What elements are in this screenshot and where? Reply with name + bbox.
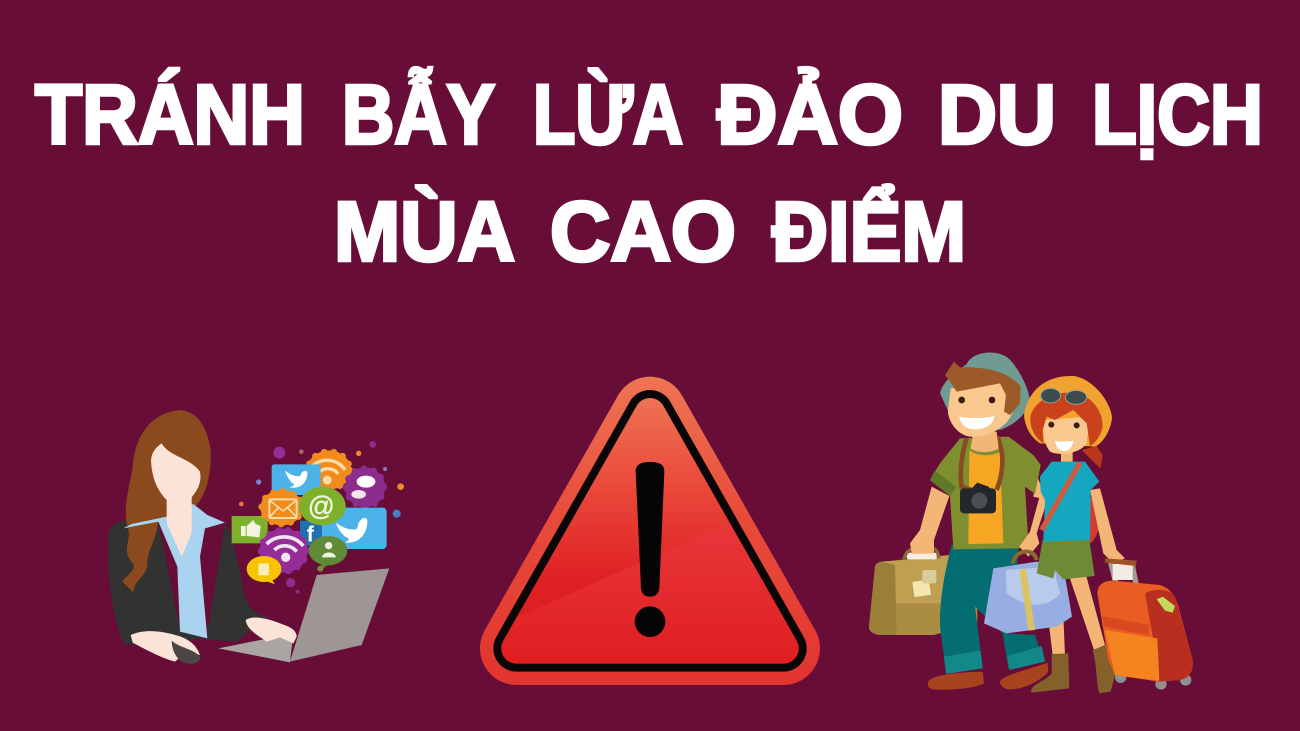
man hair (945, 362, 1021, 415)
hand on mouse (131, 631, 200, 662)
illustration: woman at laptop with social media icons (108, 410, 404, 664)
man eyes (958, 397, 995, 403)
title: DU (938, 67, 1056, 161)
woman legs (1043, 573, 1105, 655)
woman ponytail (1082, 446, 1103, 468)
title: ĐẢO (717, 67, 903, 161)
title: LỪA (533, 67, 683, 161)
man jacket (930, 437, 1041, 549)
man hand holding suitcase (911, 533, 934, 554)
laptop screen (290, 568, 389, 662)
man hat (940, 353, 1030, 430)
icon: yellow phone bubble (247, 556, 281, 584)
man smile (959, 416, 994, 429)
woman top (1040, 462, 1099, 542)
red suitcase (1097, 558, 1193, 690)
camera strap (961, 437, 1002, 492)
triangle gloss (501, 523, 799, 664)
title: BẪY (342, 67, 495, 161)
woman neck (1061, 452, 1073, 462)
man trouser cuffs (944, 646, 1045, 674)
icon: facebook tile (300, 521, 322, 547)
triangle black border (517, 413, 783, 648)
face and neck (151, 443, 200, 557)
icon: green user bubble (309, 536, 347, 571)
icon: twitter tile (272, 464, 321, 495)
man t-shirt (968, 450, 1003, 544)
camera (960, 483, 996, 513)
woman backpack (1084, 493, 1100, 544)
man neck (971, 432, 999, 452)
man sleeve cuff (930, 471, 956, 496)
triangle red face (517, 413, 783, 648)
shirt (123, 504, 225, 638)
mouse (172, 641, 201, 664)
hair (122, 410, 211, 593)
woman boots (1031, 644, 1116, 693)
title: LỊCH (1092, 67, 1263, 161)
man trousers (940, 545, 1044, 668)
woman smile (1055, 441, 1073, 451)
title (35, 67, 1263, 278)
triangle outer rim (517, 413, 783, 648)
title: CAO (550, 184, 736, 278)
warning triangle (501, 413, 799, 664)
sunglasses (1041, 388, 1087, 404)
icon: orange wifi badge (307, 450, 351, 490)
jacket (108, 521, 267, 645)
title: TRÁNH (35, 67, 305, 161)
woman arms (1019, 488, 1125, 563)
icon: green at-sign badge: @ (308, 491, 335, 521)
bag strap (1042, 463, 1080, 530)
woman hair (1030, 393, 1103, 446)
decorative coloured dots (239, 441, 404, 594)
woman shorts (1037, 540, 1095, 579)
icon: large twitter tile (322, 508, 387, 549)
man shoes (928, 663, 1048, 690)
woman eyes (1048, 422, 1080, 428)
illustration: traveler couple (869, 353, 1193, 693)
icon: purple wifi badge (260, 529, 308, 573)
icon: facebook tile: f (307, 522, 315, 547)
title: ĐIỂM (772, 184, 966, 278)
exclamation mark (635, 462, 665, 637)
icon: green at-sign badge (299, 487, 346, 525)
laptop keyboard (218, 633, 293, 662)
icon: orange mail badge (260, 490, 303, 525)
man arms (910, 475, 1047, 553)
woman hat (1024, 376, 1112, 447)
hand on laptop (246, 618, 297, 643)
man face (948, 380, 1013, 437)
tan suitcase (869, 548, 977, 635)
title: MÙA (334, 184, 515, 278)
icon: purple chat badge (345, 467, 385, 507)
shopping bag (984, 552, 1072, 633)
woman face (1043, 417, 1090, 454)
icon: green thumbs-up tile (232, 516, 268, 543)
